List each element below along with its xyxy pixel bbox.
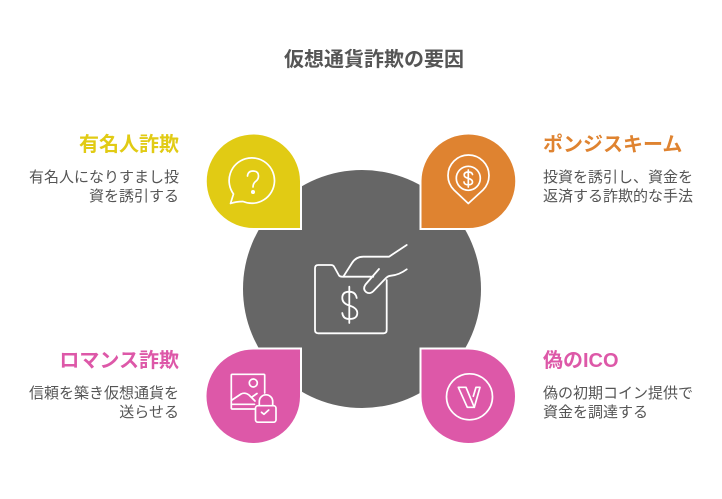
icon: circled V xyxy=(446,374,492,420)
text: romance description xyxy=(29,385,179,421)
text: fake ICO description: 資金を調達する xyxy=(543,404,648,421)
central circle xyxy=(243,170,481,408)
heading: fake ICO: 偽のICO xyxy=(543,350,619,372)
text: celebrity description: 資を誘引する xyxy=(89,188,179,205)
icon: dollar location pin xyxy=(448,155,489,204)
petal: orange xyxy=(420,134,516,229)
heading: ponzi: ポンジスキーム xyxy=(543,134,682,156)
icon: question speech bubble xyxy=(229,158,275,204)
petal: pink left xyxy=(206,348,301,444)
text: ponzi description xyxy=(543,169,693,205)
heading: romance: ロマンス詐欺 xyxy=(59,350,179,372)
text: celebrity description: 有名人になりすまし投 xyxy=(29,169,179,186)
text: ponzi description: 返済する詐欺的な手法 xyxy=(543,188,693,205)
text: ponzi description: 投資を誘引し、資金を xyxy=(543,169,693,186)
text: fake ICO description: 偽の初期コイン提供で xyxy=(543,385,693,402)
title: 仮想通貨詐欺の要因 xyxy=(284,49,464,71)
text: fake ICO description xyxy=(543,385,693,421)
text: romance description: 信頼を築き仮想通貨を xyxy=(29,385,179,402)
text: romance description: 送らせる xyxy=(119,404,179,421)
heading: celebrity: 有名人詐欺 xyxy=(79,134,179,156)
petal: yellow xyxy=(206,134,301,229)
icon: image with lock xyxy=(231,374,276,422)
text: celebrity description xyxy=(29,169,179,205)
icon: hand and dollar folder xyxy=(315,245,407,333)
petal: pink right xyxy=(420,348,516,444)
